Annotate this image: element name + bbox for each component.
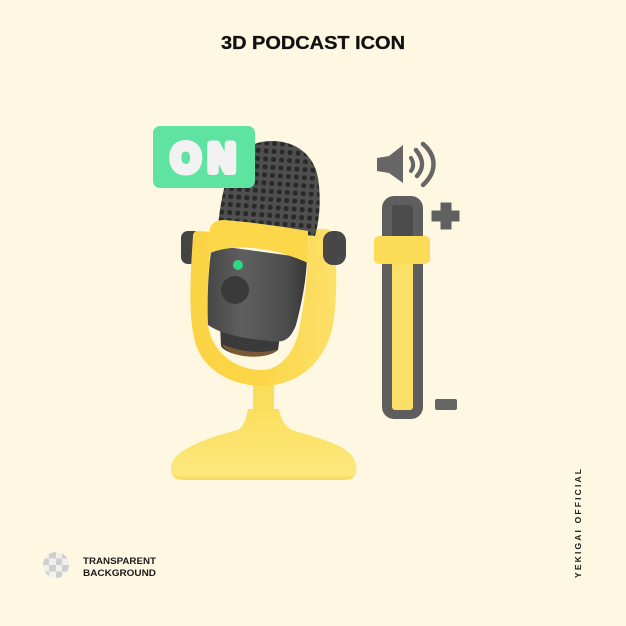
on text: ON: [171, 137, 235, 181]
microphone stem: [253, 380, 274, 412]
slider upper slot: [392, 205, 413, 245]
yellow collar: [207, 220, 308, 263]
microphone body: [208, 245, 307, 342]
dial button: [221, 276, 249, 304]
microphone grille: [218, 141, 320, 236]
transparent background label: TRANSPARENT: [83, 556, 156, 567]
right pivot knob: [323, 231, 346, 265]
on badge: [153, 126, 255, 188]
yoke fork: [190, 229, 336, 386]
title: 3D PODCAST ICON: [221, 33, 405, 53]
transparent background label: [83, 556, 156, 579]
volume slider: [374, 196, 430, 419]
icon: plus: [432, 203, 459, 229]
microphone base: [171, 409, 357, 480]
left pivot knob: [181, 231, 201, 264]
slider fill: [392, 255, 413, 410]
slider track: [382, 196, 423, 419]
green led: [233, 260, 243, 270]
icon: microphone: [171, 141, 357, 480]
icon: transparent checker: [43, 552, 69, 578]
slider handle: [374, 236, 430, 264]
icon: minus: [435, 399, 457, 410]
yekigai official label: YEKIGAI OFFICIAL: [573, 469, 583, 578]
mic capsule bottom: [220, 325, 280, 357]
transparent background label: BACKGROUND: [83, 568, 156, 579]
icon: speaker: [377, 144, 434, 185]
